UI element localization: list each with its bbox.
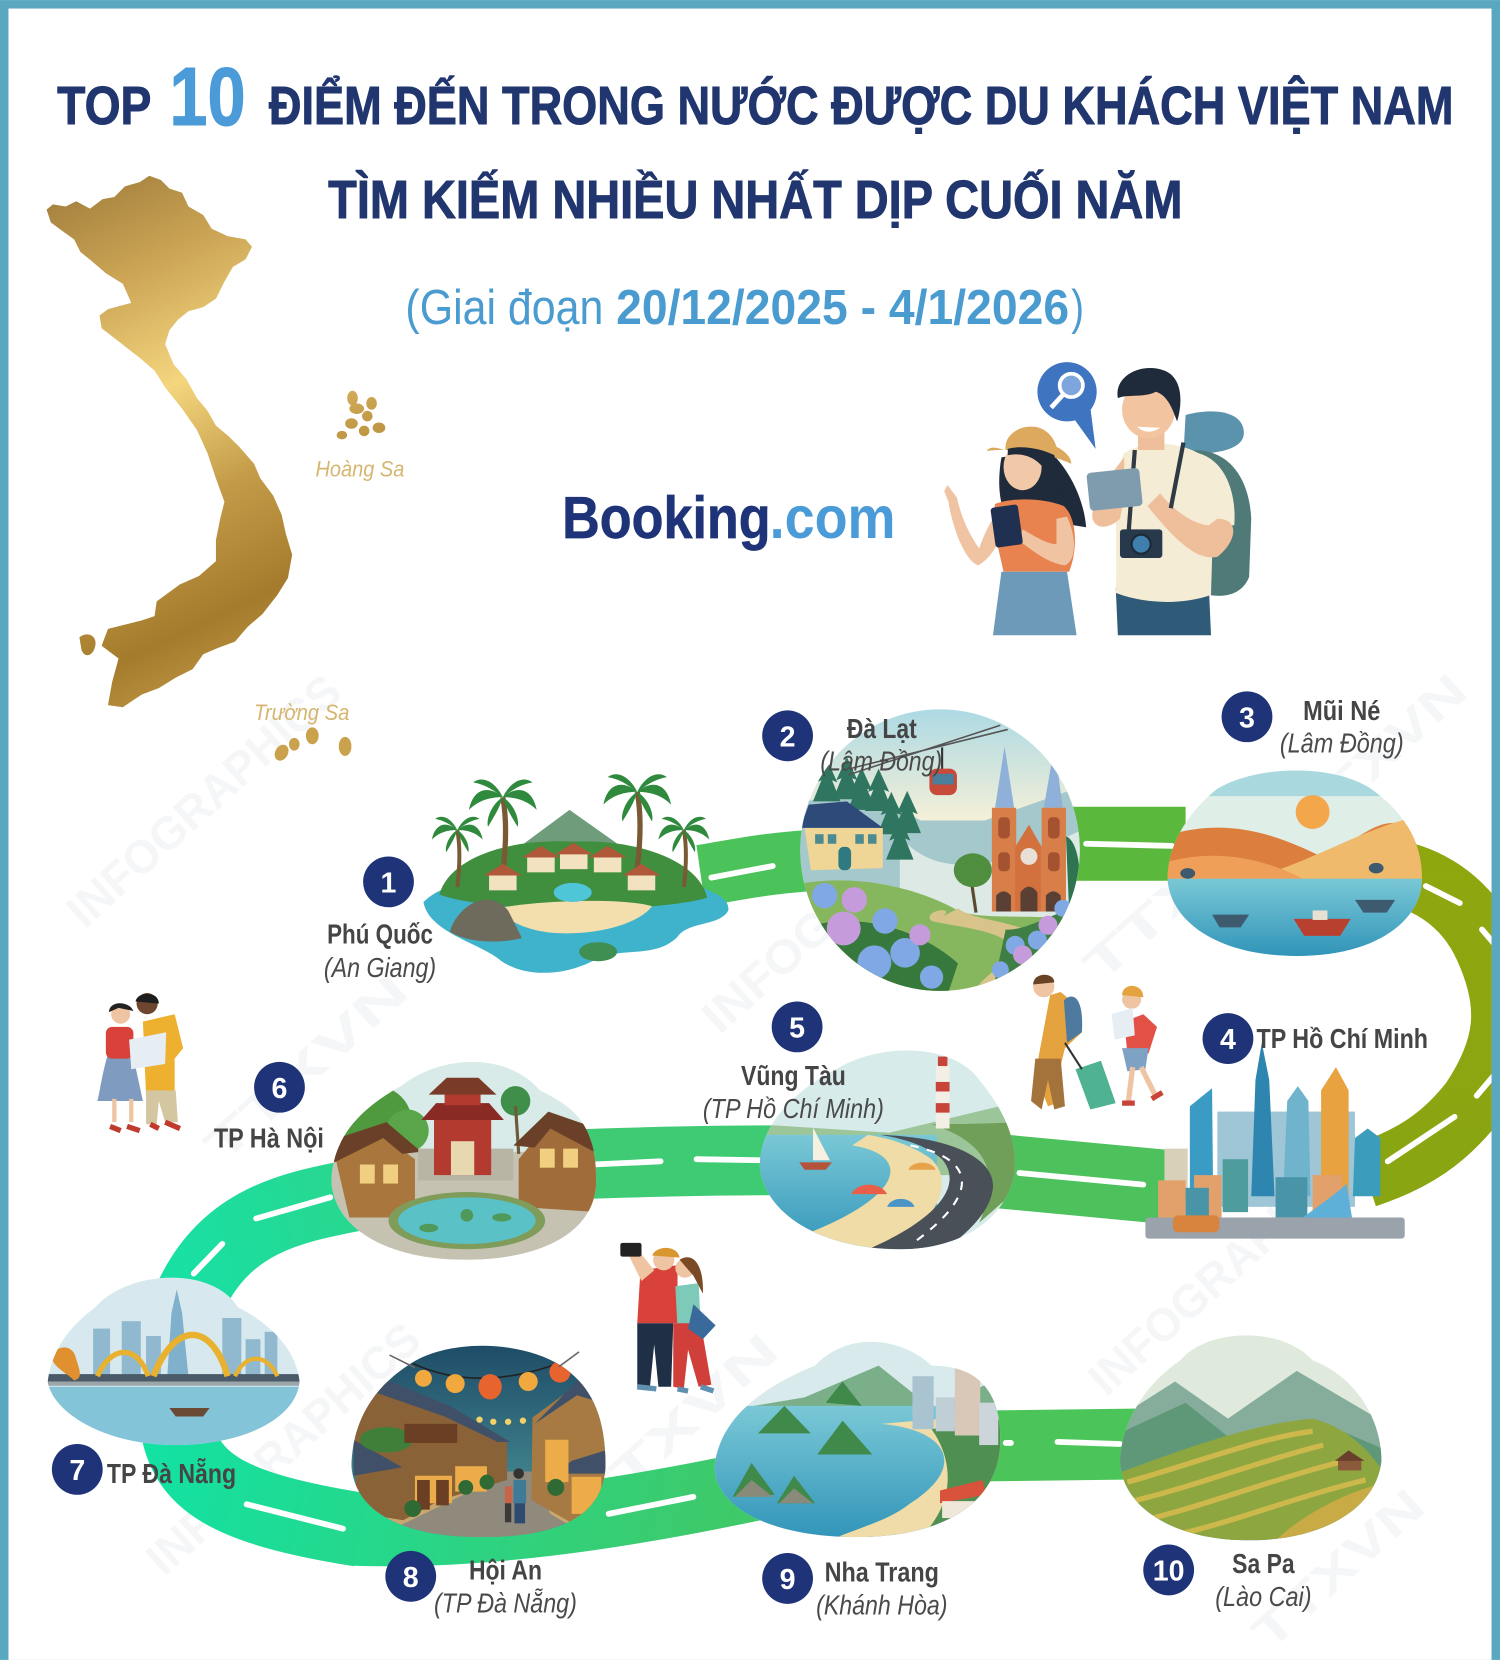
title: 10 xyxy=(169,51,246,143)
watermarks: INFOGRAPHICS xyxy=(1078,1132,1373,1405)
stop 3: Mũi Né: (Lâm Đồng) xyxy=(1280,728,1404,759)
icon: magnifier bubble xyxy=(1037,362,1097,449)
stop 1: Phú Quốc xyxy=(324,856,436,983)
stop 1: Phú Quốc: (An Giang) xyxy=(324,952,436,983)
winding road with ten stops xyxy=(177,844,1500,1531)
subtitle: period: (Giai đoạn xyxy=(405,281,603,335)
stop 7: TP Đà Nẵng xyxy=(52,1444,236,1495)
scene: Sa Pa xyxy=(1120,1336,1382,1540)
label: Trường Sa: Trường Sa xyxy=(254,700,349,725)
watermarks: TTXVN xyxy=(194,963,418,1172)
stop 2: Đà Lạt: (Lâm Đồng) xyxy=(820,746,942,777)
stop 2: Đà Lạt: 2 xyxy=(780,721,796,753)
watermarks: INFOGRAPHICS xyxy=(136,1312,430,1585)
scene: Mũi Né xyxy=(1164,764,1424,958)
road segment: stop 7 to 8 xyxy=(177,1424,360,1530)
stop 5: Vũng Tàu: Vũng Tàu xyxy=(741,1060,846,1091)
subtitle: period: 20/12/2025 - 4/1/2026 xyxy=(616,281,1069,335)
stop 5: Vũng Tàu: (TP Hồ Chí Minh) xyxy=(703,1093,884,1124)
stop 8: Hội An xyxy=(385,1551,577,1618)
church xyxy=(992,746,1066,912)
road segment: stop 1 to 3 xyxy=(701,844,1186,876)
map of Vietnam xyxy=(47,176,385,763)
watermarks: TTXVN xyxy=(565,1323,788,1532)
islands: Trường Sa xyxy=(272,727,351,763)
stop 9: Nha Trang: 9 xyxy=(780,1564,796,1596)
stop 4: TP Hồ Chí Minh: 4 xyxy=(1220,1024,1236,1056)
watermarks: TTXVN xyxy=(1242,1479,1434,1659)
gondola xyxy=(848,725,1008,795)
stop 9: Nha Trang xyxy=(762,1553,947,1620)
road segment: stop 8 to 9 xyxy=(355,1484,762,1531)
stop 4: TP Hồ Chí Minh: TP Hồ Chí Minh xyxy=(1257,1023,1428,1054)
scene: TP Hồ Chí Minh xyxy=(1145,1043,1405,1239)
scene: Đà Lạt xyxy=(794,704,1090,995)
stop 9: Nha Trang: Nha Trang xyxy=(825,1557,939,1588)
scene: TP Hà Nội xyxy=(328,1053,603,1265)
watermarks: TTXVN xyxy=(1285,663,1477,844)
illustration: couple taking photo xyxy=(620,1243,716,1391)
stop 5: Vũng Tàu xyxy=(703,1001,884,1124)
illustration: couple with map xyxy=(97,993,183,1131)
road segment: stop 4 to 5 xyxy=(984,1170,1175,1188)
scene: Nha Trang xyxy=(714,1342,1000,1538)
label: Hoàng Sa: Hoàng Sa xyxy=(315,456,404,481)
stop 1: Phú Quốc: 1 xyxy=(381,867,397,899)
road segment: stop 6 to 7 xyxy=(191,1194,360,1297)
scene: Vũng Tàu xyxy=(760,1050,1015,1250)
lantern string ends xyxy=(390,1352,579,1368)
Booking.com logo: Booking xyxy=(562,484,771,551)
lane markings xyxy=(194,844,1495,1529)
scene: Hội An xyxy=(349,1339,609,1540)
stop 10: Sa Pa: Sa Pa xyxy=(1232,1548,1295,1579)
title: TÌM KIẾM NHIỀU NHẤT DỊP CUỐI NĂM xyxy=(328,170,1182,230)
stop 9: Nha Trang: (Khánh Hòa) xyxy=(816,1589,947,1620)
Booking.com logo: .com xyxy=(770,484,896,551)
stop 6: TP Hà Nội: TP Hà Nội xyxy=(214,1123,324,1154)
title xyxy=(57,51,1453,230)
stop 7: TP Đà Nẵng: 7 xyxy=(69,1455,85,1487)
road segment: stop 5 to 6 xyxy=(572,1160,783,1165)
watermarks xyxy=(57,663,1477,1659)
islands: Hoàng Sa xyxy=(337,391,385,439)
stop 7: TP Đà Nẵng: TP Đà Nẵng xyxy=(107,1457,236,1489)
stop 10: Sa Pa: (Lào Cai) xyxy=(1215,1581,1312,1612)
illustration: travellers searching xyxy=(944,362,1251,635)
stop 8: Hội An: (TP Đà Nẵng) xyxy=(434,1587,577,1618)
stop 3: Mũi Né xyxy=(1222,691,1404,759)
man xyxy=(1086,368,1251,635)
stop 3: Mũi Né: Mũi Né xyxy=(1303,695,1380,726)
stop 8: Hội An: Hội An xyxy=(469,1554,542,1585)
woman xyxy=(944,427,1086,635)
watermarks: INFOGRAPHICS xyxy=(57,665,351,937)
subtitle: period xyxy=(405,281,1084,335)
watermarks: TTXVN xyxy=(1073,783,1296,992)
stop 6: TP Hà Nội xyxy=(214,1062,324,1154)
stop 4: TP Hồ Chí Minh xyxy=(1203,1013,1428,1064)
road segment: stop 3 to 4 xyxy=(1366,870,1500,1175)
scene: Phú Quốc island xyxy=(423,774,728,973)
road segment: stop 9 to 10 xyxy=(974,1444,1143,1446)
stop 2: Đà Lạt xyxy=(762,710,942,777)
illustration: hikers with luggage xyxy=(1031,975,1162,1109)
stop 8: Hội An: 8 xyxy=(403,1562,419,1594)
stop 10: Sa Pa xyxy=(1143,1545,1312,1612)
watermarks: INFOG xyxy=(692,898,845,1043)
island: Phú Quốc xyxy=(79,634,96,655)
scene: TP Đà Nẵng xyxy=(48,1278,300,1445)
stop 1: Phú Quốc: Phú Quốc xyxy=(327,918,433,949)
stop 3: Mũi Né: 3 xyxy=(1239,702,1255,734)
title: TOP xyxy=(57,76,151,136)
subtitle: period: ) xyxy=(1071,281,1084,335)
stop 10: Sa Pa: 10 xyxy=(1153,1556,1185,1588)
stop 5: Vũng Tàu: 5 xyxy=(789,1012,805,1044)
stop 2: Đà Lạt: Đà Lạt xyxy=(847,713,917,744)
stop 6: TP Hà Nội: 6 xyxy=(272,1073,287,1105)
